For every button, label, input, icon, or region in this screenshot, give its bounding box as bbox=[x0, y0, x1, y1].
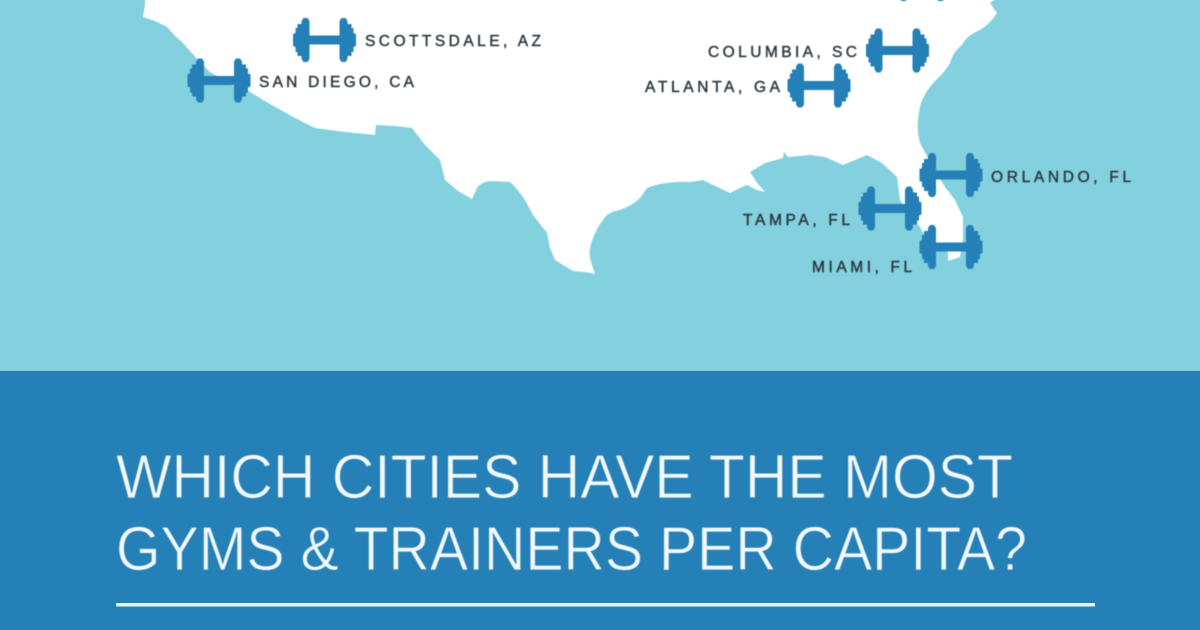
icon: dumbbell bbox=[188, 58, 250, 102]
marker: Scottsdale, AZ bbox=[293, 18, 541, 62]
icon: dumbbell bbox=[920, 225, 982, 269]
icon: dumbbell bbox=[920, 153, 982, 197]
marker: Tampa, FL bbox=[743, 186, 922, 230]
marker: San Diego, CA bbox=[188, 58, 415, 102]
marker: Miami, FL bbox=[812, 225, 982, 276]
title: WHICH CITIES HAVE THE MOST bbox=[116, 443, 1013, 512]
label: ORLANDO, FL bbox=[991, 169, 1131, 186]
panel: title band bbox=[0, 371, 1200, 630]
divider rule under title bbox=[116, 603, 1095, 606]
title: GYMS & TRAINERS PER CAPITA? bbox=[116, 515, 1027, 584]
icon: dumbbell bbox=[858, 186, 922, 230]
marker: Columbia, SC bbox=[708, 28, 929, 72]
marker: Atlanta, GA bbox=[645, 64, 850, 108]
label: COLUMBIA, SC bbox=[708, 44, 857, 61]
label: MIAMI, FL bbox=[812, 259, 912, 276]
label: SCOTTSDALE, AZ bbox=[365, 33, 541, 50]
map: southern United States landmass bbox=[143, 0, 997, 274]
label: SAN DIEGO, CA bbox=[259, 74, 415, 91]
title bbox=[116, 443, 1027, 584]
icon: dumbbell bbox=[293, 18, 356, 62]
label: TAMPA, FL bbox=[743, 212, 850, 229]
icon: dumbbell bbox=[866, 28, 929, 72]
icons: cropped dumbbell fragments at top edge bbox=[901, 0, 943, 1]
marker: Orlando, FL bbox=[920, 153, 1131, 197]
label: ATLANTA, GA bbox=[645, 79, 781, 96]
icon: dumbbell bbox=[788, 64, 850, 108]
panel: map background bbox=[0, 0, 1200, 372]
